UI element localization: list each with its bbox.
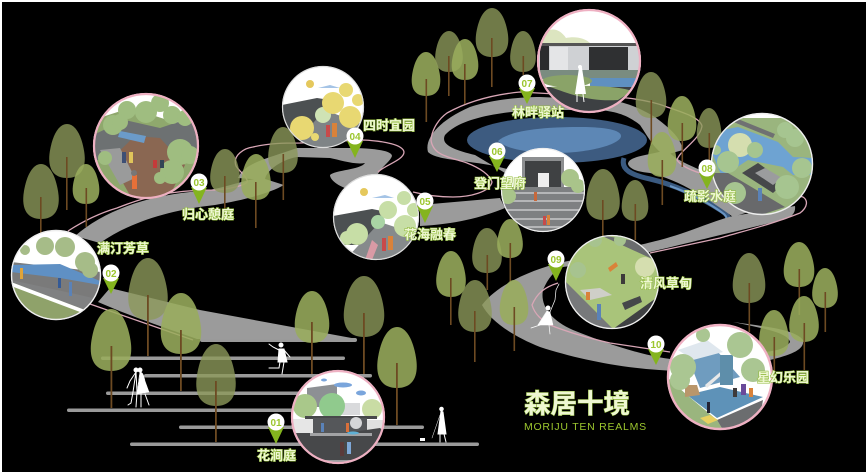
- map pins: [102, 74, 716, 444]
- title: [524, 389, 647, 433]
- figure: couple: [127, 368, 149, 407]
- scene 08: shaded water court: [711, 113, 813, 217]
- winding path: [75, 97, 683, 339]
- label 03: 归心憩庭: [182, 207, 234, 222]
- route line: [68, 92, 806, 352]
- pin 05: [416, 192, 434, 223]
- pin 02: 02: [105, 269, 117, 280]
- label 09: 清风草甸: [640, 276, 692, 291]
- road: fold by the stream: [628, 150, 770, 217]
- scene 02: waterside: [11, 230, 101, 320]
- pin 06: 06: [491, 147, 503, 158]
- title: chinese: 森居十境: [524, 389, 630, 419]
- scene 06: grand entrance: [500, 148, 585, 232]
- label 05: 花海融春: [404, 227, 456, 242]
- stream: [623, 158, 729, 238]
- pin 03: 03: [193, 178, 205, 189]
- stepped terraces: [67, 338, 479, 446]
- walking figures: [127, 284, 559, 442]
- road: playground tail: [733, 322, 803, 360]
- pin 08: [698, 160, 716, 189]
- pin 01: [268, 414, 284, 444]
- scene 10: starry playground: [667, 324, 773, 430]
- tree group east: [586, 72, 721, 240]
- tree group north: [412, 8, 536, 122]
- label 10: 星幻乐园: [757, 370, 809, 385]
- pin 09: 09: [550, 255, 562, 266]
- label 08: 疏影水庭: [684, 189, 736, 204]
- pin 10: [648, 336, 664, 365]
- scene 05: flower sea: [333, 174, 421, 260]
- scene 04: four seasons garden: [282, 66, 364, 148]
- label 06: 登门望府: [474, 176, 526, 191]
- label 01: 花涧庭: [257, 448, 296, 463]
- scene 01: flower stream court: [291, 370, 385, 464]
- pin 04: [346, 128, 364, 158]
- figure: runner: [269, 343, 290, 374]
- figure: woman with dog: [420, 407, 446, 442]
- pin 04: 04: [349, 132, 361, 143]
- road: meadow loop: [482, 206, 795, 371]
- winding path east: [482, 150, 803, 371]
- label 02: 满汀芳草: [97, 241, 149, 256]
- tree group south-east: [733, 242, 838, 372]
- label 07: 林畔驿站: [512, 105, 564, 120]
- pin 09: [548, 250, 564, 281]
- pin 05: 05: [419, 197, 431, 208]
- pin 06: [488, 142, 506, 172]
- pin 07: [518, 74, 536, 104]
- pin 07: 07: [521, 79, 533, 90]
- label 04: 四时宜园: [363, 118, 415, 133]
- pin 02: [102, 264, 120, 294]
- scene 07: lakeside station: [537, 9, 641, 113]
- pin 01: 01: [270, 418, 282, 429]
- pin 08: 08: [701, 164, 713, 175]
- tree group south-west: [91, 258, 417, 442]
- pin 03: [190, 174, 208, 204]
- scene 09: breeze meadow: [565, 233, 659, 329]
- lake: [467, 117, 647, 163]
- figure: kite girl: [531, 284, 559, 334]
- tree group west: [23, 124, 298, 233]
- title: english: MORIJU TEN REALMS: [524, 421, 647, 433]
- tree group centre: [436, 219, 528, 362]
- pin 10: 10: [650, 340, 662, 351]
- scene 03: courtyard: [93, 93, 199, 199]
